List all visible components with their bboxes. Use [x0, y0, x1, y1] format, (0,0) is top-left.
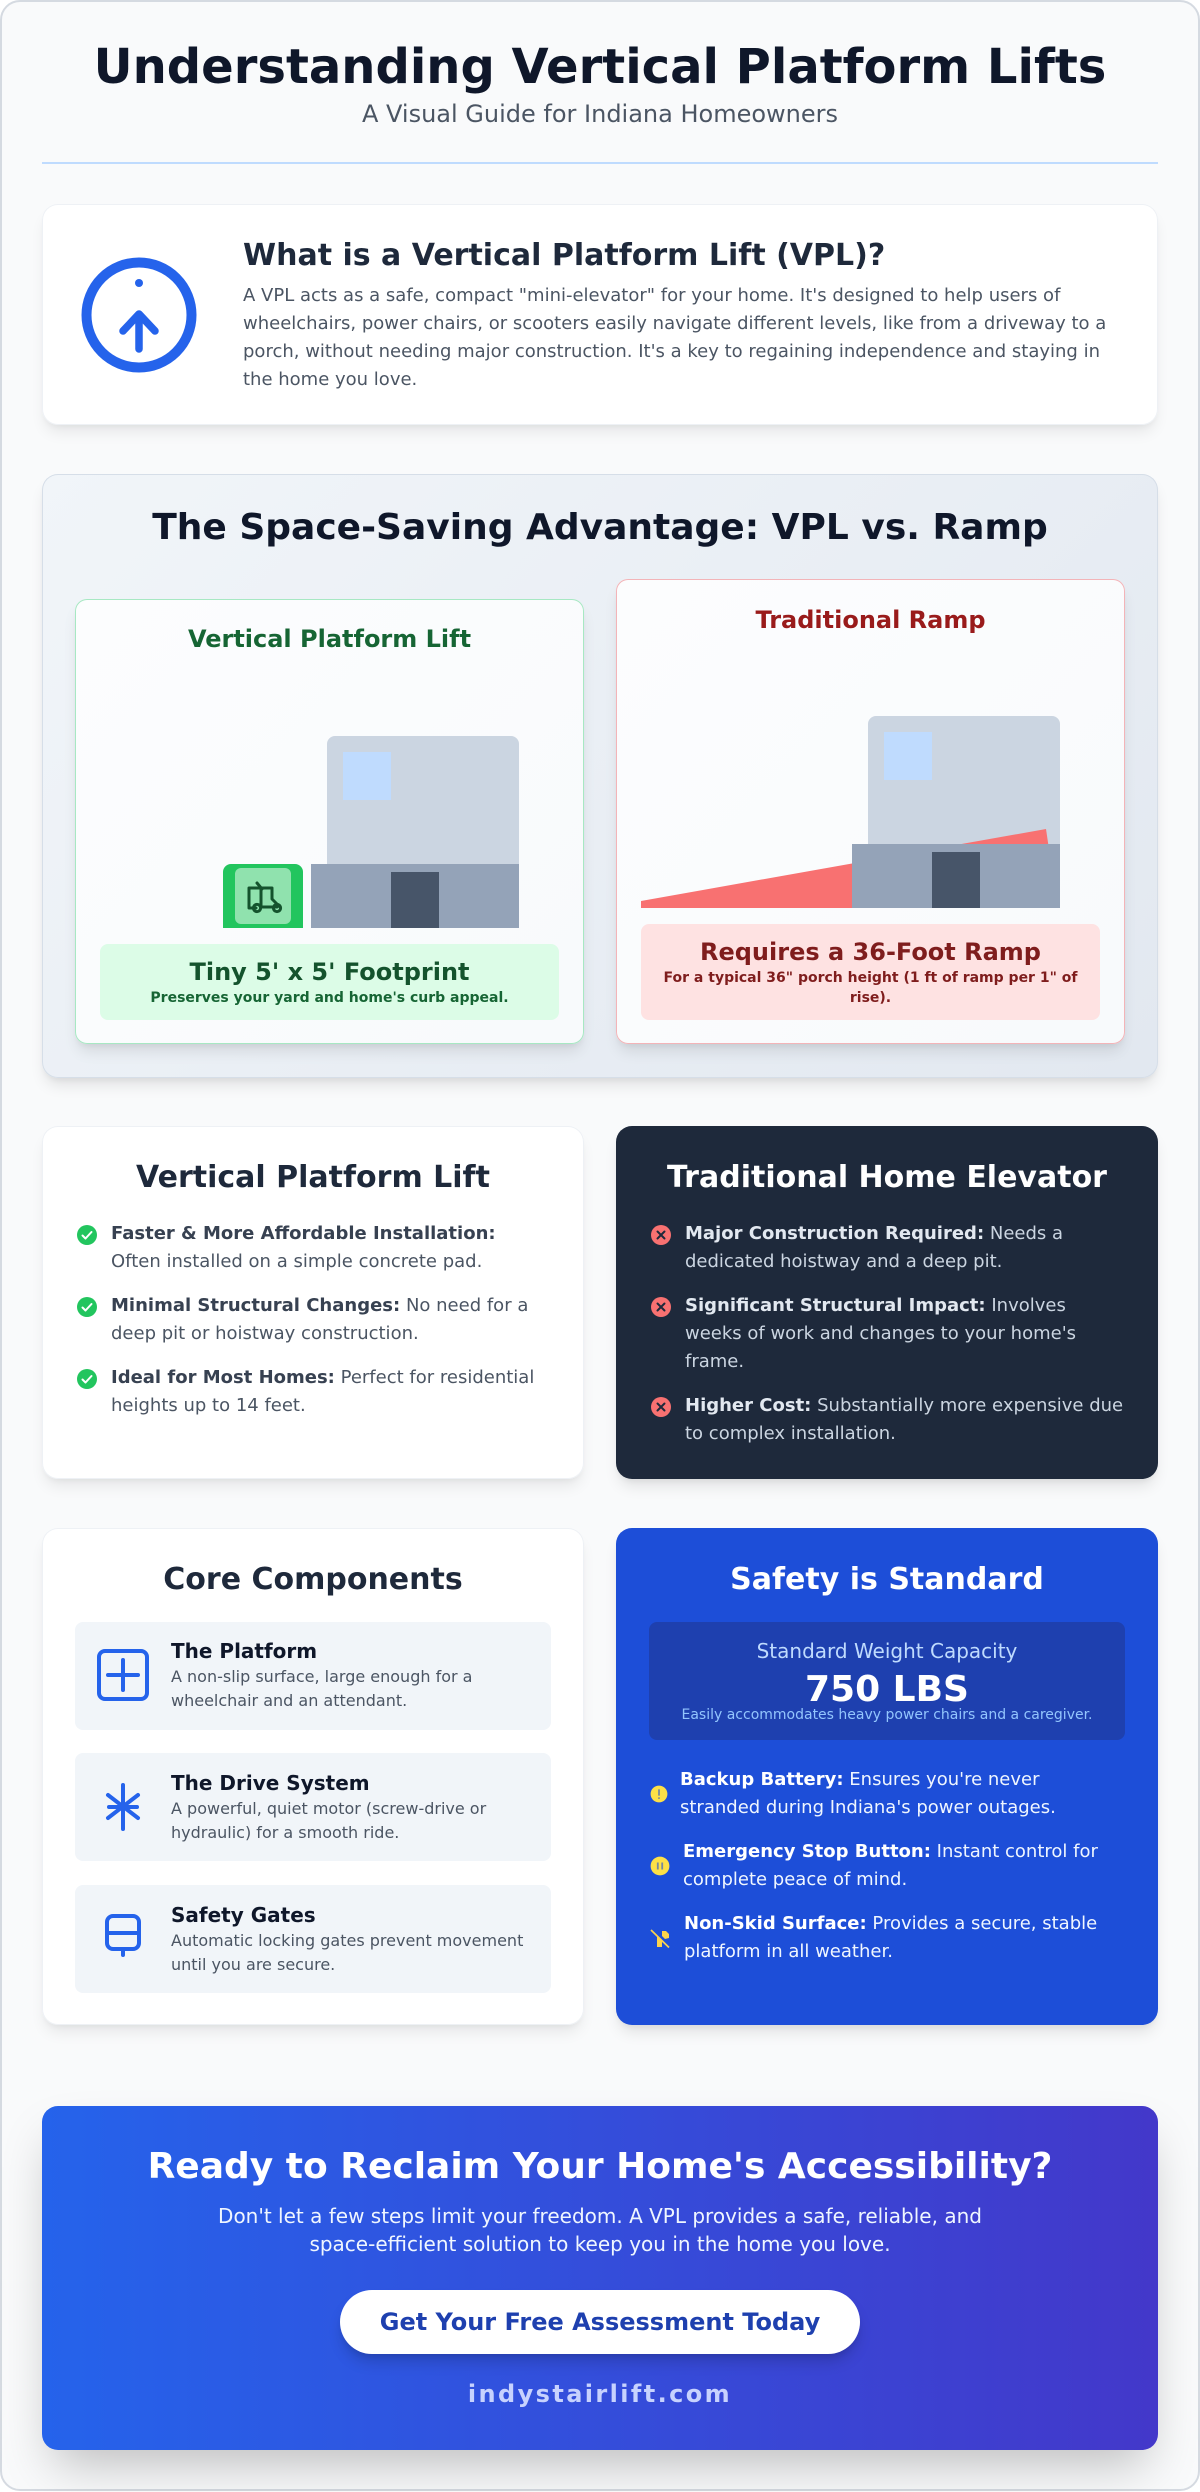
drawback: major construction — [651, 1223, 1063, 1272]
component description — [171, 1931, 523, 1974]
drawback: higher cost — [651, 1395, 1123, 1444]
porch — [311, 864, 519, 928]
panel heading: Core Components — [163, 1562, 463, 1597]
house window — [884, 732, 932, 780]
component text — [171, 1639, 472, 1710]
component text — [171, 1771, 486, 1842]
component: platform — [75, 1622, 551, 1730]
illustration: house with lift — [223, 736, 519, 928]
feature text — [684, 1910, 1097, 1966]
button label: Get Your Free Assessment Today — [380, 2308, 820, 2336]
door — [391, 872, 439, 928]
caption: ramp length — [641, 924, 1100, 1020]
panel: traditional home elevator drawbacks — [616, 1126, 1158, 1479]
weight capacity stat — [649, 1622, 1125, 1740]
cta button — [340, 2290, 860, 2354]
benefit text — [111, 1367, 534, 1416]
feature: emergency stop — [650, 1841, 1098, 1890]
panel: vertical platform lift illustration — [75, 599, 584, 1044]
call to action — [42, 2106, 1158, 2450]
website: indystairlift.com — [468, 2380, 732, 2408]
icon: drive asterisk — [106, 1783, 140, 1831]
panel: safety is standard — [616, 1528, 1158, 2025]
section heading: The Space-Saving Advantage: VPL vs. Ramp — [152, 507, 1048, 548]
lift platform — [223, 864, 303, 928]
component description: hydraulic) for a smooth ride. — [171, 1823, 399, 1842]
benefit text: deep pit or hoistway construction. — [111, 1323, 419, 1344]
cta text: space-efficient solution to keep you in the home you love. — [309, 2232, 891, 2256]
drawback: structural impact — [651, 1295, 1076, 1372]
intro paragraph: wheelchairs, power chairs, or scooters easily navigate different levels, like from a driveway to a — [243, 313, 1106, 334]
feature text — [683, 1838, 1098, 1894]
drawback text: Significant Structural Impact: Involves — [685, 1295, 1066, 1316]
icon: cross — [651, 1397, 671, 1417]
header divider — [42, 162, 1158, 164]
component name: The Platform — [171, 1639, 317, 1663]
feature text: Emergency Stop Button: Instant control for — [683, 1841, 1098, 1862]
panel heading: Safety is Standard — [730, 1562, 1044, 1597]
caption headline: Requires a 36-Foot Ramp — [700, 938, 1041, 966]
benefit text — [111, 1295, 528, 1344]
component description: A powerful, quiet motor (screw-drive or — [171, 1799, 486, 1818]
house upper wall — [327, 736, 519, 864]
intro paragraph: porch, without needing major construction. It's a key to regaining independence and staying in — [243, 341, 1100, 362]
drawback text: Higher Cost: Substantially more expensive due — [685, 1395, 1123, 1416]
stat note: Easily accommodates heavy power chairs and a caregiver. — [681, 1707, 1093, 1723]
icon: check — [77, 1369, 97, 1389]
component description: Automatic locking gates prevent movement — [171, 1931, 523, 1950]
intro paragraph: A VPL acts as a safe, compact "mini-elevator" for your home. It's designed to help users of — [243, 285, 1060, 306]
icon: check — [77, 1225, 97, 1245]
feature: backup battery — [650, 1769, 1056, 1818]
intro paragraph: the home you love. — [243, 369, 417, 390]
feature text: complete peace of mind. — [683, 1869, 907, 1890]
subtitle: A Visual Guide for Indiana Homeowners — [362, 100, 838, 128]
panel: vertical platform lift benefits — [42, 1126, 584, 1479]
panel heading: Vertical Platform Lift — [136, 1160, 490, 1195]
component description: A non-slip surface, large enough for a — [171, 1667, 472, 1686]
panel: space-saving advantage — [42, 474, 1158, 1078]
component name: Safety Gates — [171, 1903, 316, 1927]
component description: wheelchair and an attendant. — [171, 1691, 407, 1710]
benefit text — [111, 1223, 496, 1272]
drawback text: weeks of work and changes to your home's — [685, 1323, 1076, 1344]
cta heading: Ready to Reclaim Your Home's Accessibility? — [148, 2146, 1052, 2187]
feature text: platform in all weather. — [684, 1941, 893, 1962]
header — [42, 39, 1158, 164]
drawback text: to complex installation. — [685, 1423, 896, 1444]
icon: cross — [651, 1225, 671, 1245]
benefit: ideal for most homes — [77, 1367, 534, 1416]
caption detail: For a typical 36" porch height (1 ft of ramp per 1" of — [664, 970, 1077, 986]
component description — [171, 1667, 472, 1710]
ramp — [641, 829, 1048, 908]
caption detail: rise). — [850, 990, 891, 1006]
icon: no-slip — [650, 1929, 672, 1949]
feature text: Non-Skid Surface: Provides a secure, stable — [684, 1913, 1097, 1934]
benefit text: Ideal for Most Homes: Perfect for residential — [111, 1367, 534, 1388]
component description: until you are secure. — [171, 1955, 335, 1974]
stat value: 750 LBS — [805, 1669, 969, 1710]
component description — [171, 1799, 486, 1842]
card title: Traditional Ramp — [755, 606, 986, 634]
feature text: Backup Battery: Ensures you're never — [680, 1769, 1039, 1790]
icon: alert — [650, 1786, 668, 1802]
drawback text — [685, 1395, 1123, 1444]
title: Understanding Vertical Platform Lifts — [94, 39, 1106, 95]
house window — [343, 752, 391, 800]
card title: Vertical Platform Lift — [188, 625, 471, 653]
panel: traditional ramp illustration — [616, 579, 1125, 1044]
benefit text: Often installed on a simple concrete pad. — [111, 1251, 482, 1272]
cta text: Don't let a few steps limit your freedom. A VPL provides a safe, reliable, and — [218, 2204, 982, 2228]
drawback text: frame. — [685, 1351, 744, 1372]
benefit: faster installation — [77, 1223, 496, 1272]
component: drive system — [75, 1753, 551, 1861]
benefit text: Faster & More Affordable Installation: — [111, 1223, 496, 1244]
caption detail — [664, 970, 1078, 1006]
caption: footprint — [100, 944, 559, 1020]
component name: The Drive System — [171, 1771, 370, 1795]
door — [932, 852, 980, 908]
benefit text: heights up to 14 feet. — [111, 1395, 306, 1416]
panel: what is a VPL — [42, 204, 1158, 425]
lift cab — [235, 868, 291, 924]
drawback text — [685, 1223, 1063, 1272]
icon: upward arrow in circle — [82, 258, 196, 372]
house upper wall — [868, 716, 1060, 844]
icon: platform square — [97, 1649, 149, 1701]
icon: gate — [105, 1914, 141, 1957]
icon: wheelchair on lift — [248, 881, 282, 914]
component text — [171, 1903, 523, 1974]
intro heading: What is a Vertical Platform Lift (VPL)? — [243, 238, 885, 273]
icon: check — [77, 1297, 97, 1317]
porch — [852, 844, 1060, 908]
feature text — [680, 1769, 1056, 1818]
icon: pause — [650, 1856, 670, 1876]
feature: non-skid surface — [649, 1910, 1125, 1966]
icon: cross — [651, 1297, 671, 1317]
panel: core components — [42, 1528, 584, 2025]
caption detail: Preserves your yard and home's curb appeal. — [150, 990, 509, 1006]
panel heading: Traditional Home Elevator — [667, 1160, 1107, 1195]
feature text: stranded during Indiana's power outages. — [680, 1797, 1056, 1818]
cta text — [42, 2202, 1158, 2258]
intro paragraph — [243, 285, 1106, 390]
benefit text: Minimal Structural Changes: No need for a — [111, 1295, 528, 1316]
benefit: minimal changes — [77, 1295, 528, 1344]
caption headline: Tiny 5' x 5' Footprint — [190, 958, 470, 986]
drawback text: Major Construction Required: Needs a — [685, 1223, 1063, 1244]
drawback text — [685, 1295, 1076, 1372]
component: safety gates — [75, 1885, 551, 1993]
drawback text: dedicated hoistway and a deep pit. — [685, 1251, 1002, 1272]
stat label: Standard Weight Capacity — [757, 1639, 1017, 1663]
illustration: house with ramp — [641, 716, 1060, 908]
